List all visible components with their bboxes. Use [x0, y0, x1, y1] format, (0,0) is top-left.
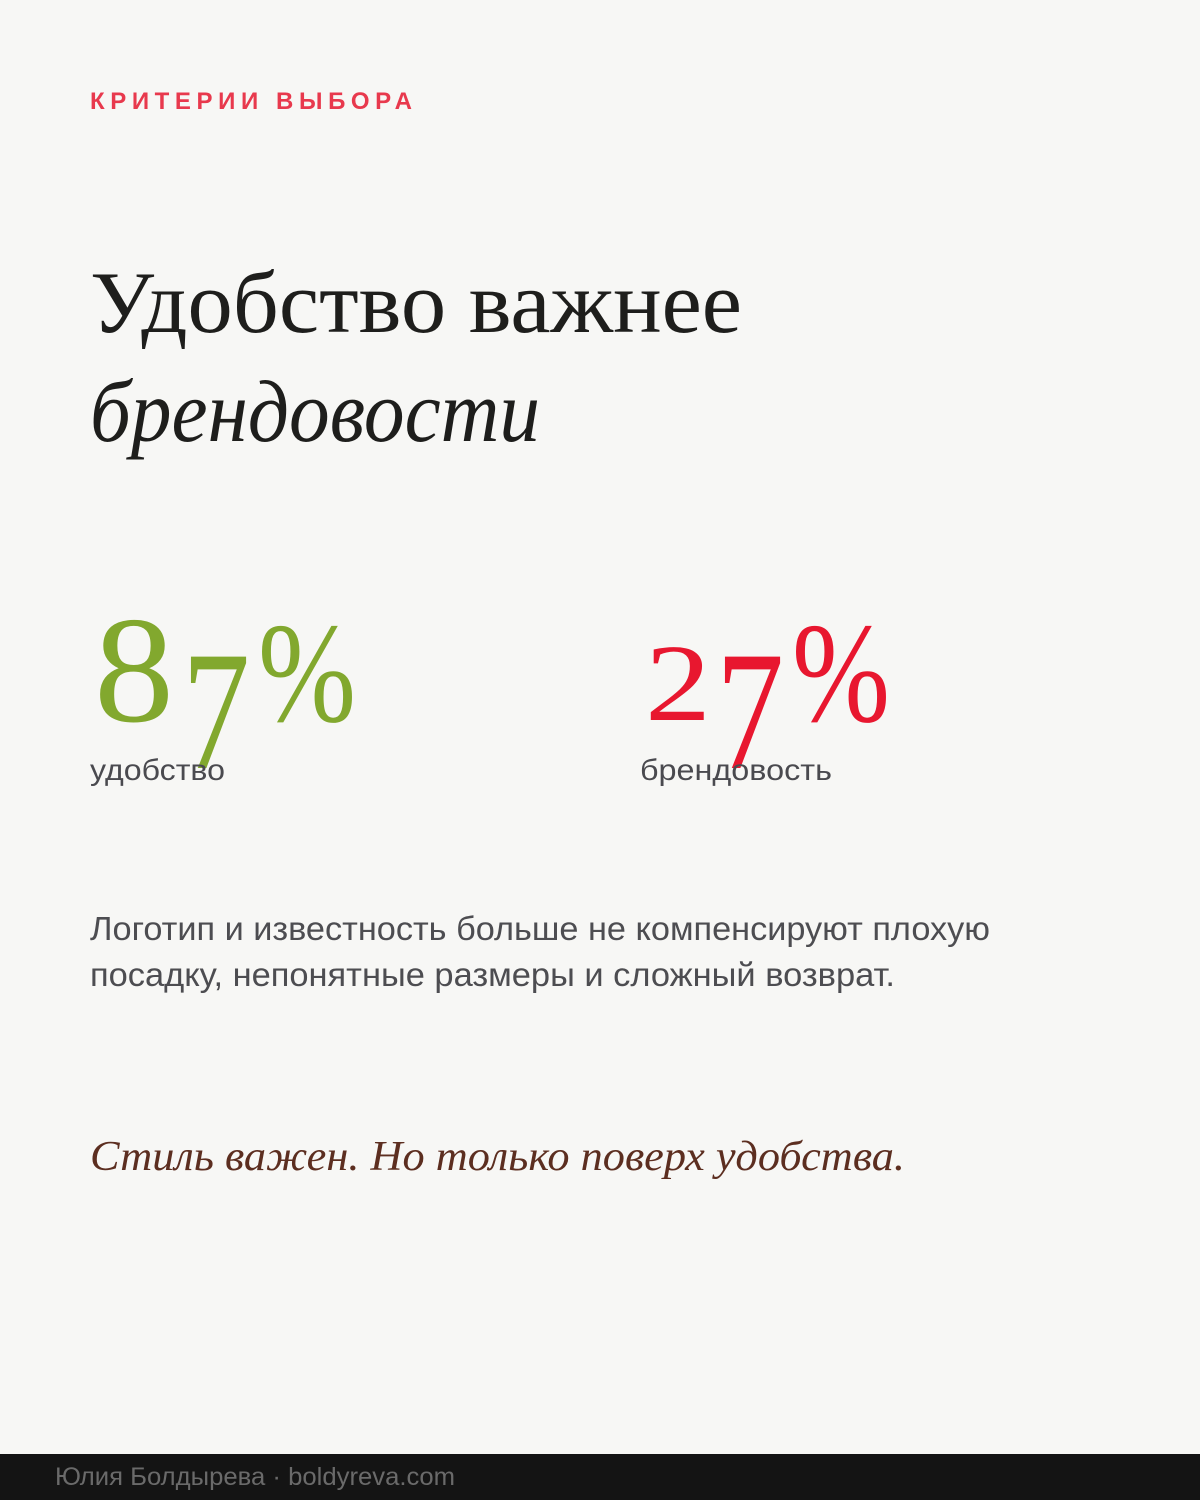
number 27%: [645, 594, 890, 805]
title line 2: брендовости: [90, 364, 540, 461]
stat: 87% convenience: [90, 586, 356, 805]
number 27%: 2: [645, 622, 711, 744]
number 87%: 8: [94, 586, 174, 754]
number 87%: [94, 586, 356, 805]
title line 1: Удобство важнее: [90, 255, 742, 352]
stat: 27% brand: [640, 594, 890, 805]
body paragraph: [90, 910, 990, 993]
label: convenience: удобство: [90, 754, 225, 787]
number 87%: %: [258, 594, 356, 752]
footer credit: Юлия Болдырева · boldyreva.com: [55, 1463, 455, 1491]
paragraph line 1: Логотип и известность больше не компенсируют плохую: [90, 910, 990, 947]
eyebrow label: КРИТЕРИИ ВЫБОРА: [90, 88, 412, 115]
number 27%: 7: [716, 617, 784, 805]
label: brand: брендовость: [640, 754, 832, 787]
number 27%: %: [792, 594, 890, 752]
paragraph line 2: посадку, непонятные размеры и сложный возврат.: [90, 956, 895, 993]
closing quote: Стиль важен. Но только поверх удобства.: [90, 1134, 905, 1180]
number 87%: 7: [182, 617, 250, 805]
footer bar: [0, 1454, 1200, 1500]
title: [90, 255, 742, 461]
